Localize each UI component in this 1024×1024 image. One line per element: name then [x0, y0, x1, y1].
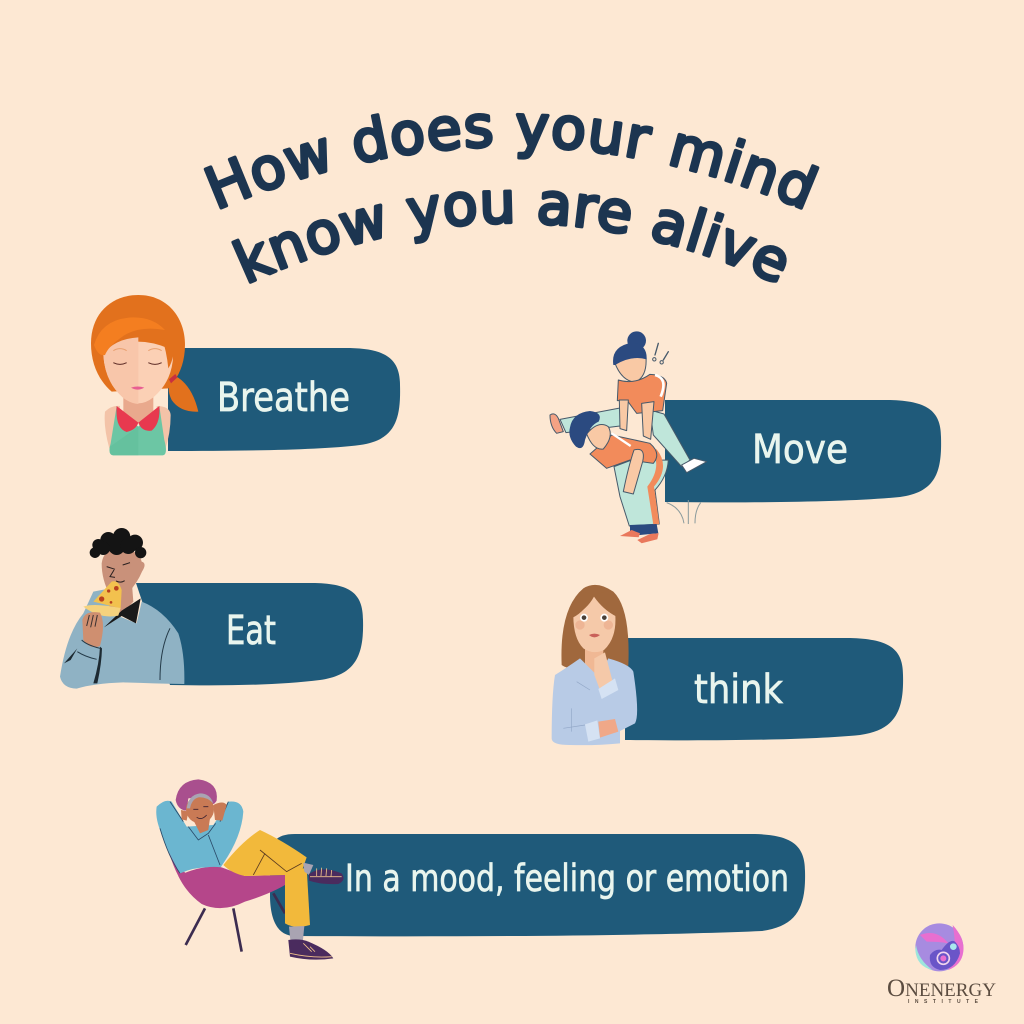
icon: woman breathing — [91, 295, 198, 455]
panel: think — [552, 585, 903, 745]
icon: man eating pizza — [60, 528, 184, 689]
label: breathe: Breathe — [217, 375, 350, 421]
logo: Onenergy Institute — [887, 923, 996, 1005]
label: mood: In a mood, feeling or emotion — [345, 857, 789, 900]
title — [204, 112, 820, 284]
logo name: ONENERGY — [887, 975, 996, 1002]
panel: move — [550, 331, 941, 543]
label pill: move — [665, 400, 941, 502]
label pill: think — [625, 638, 903, 740]
icon: person relaxing in chair — [156, 779, 344, 960]
title: How does your mind — [204, 112, 820, 210]
label: move: Move — [752, 427, 848, 473]
panel: eat — [60, 528, 363, 689]
label pill: eat — [136, 583, 363, 685]
icon: two people playing leapfrog — [550, 331, 707, 543]
icon: woman thinking — [552, 585, 637, 745]
logo tagline: INSTITUTE — [908, 999, 979, 1005]
label pill: mood — [270, 834, 805, 936]
logo mark — [915, 923, 964, 971]
label: eat: Eat — [226, 608, 276, 654]
title: know you are alive — [231, 190, 787, 284]
label pill: breathe — [168, 348, 400, 451]
panel: mood — [156, 779, 805, 960]
label: think: think — [694, 667, 784, 713]
panel: breathe — [91, 295, 400, 455]
